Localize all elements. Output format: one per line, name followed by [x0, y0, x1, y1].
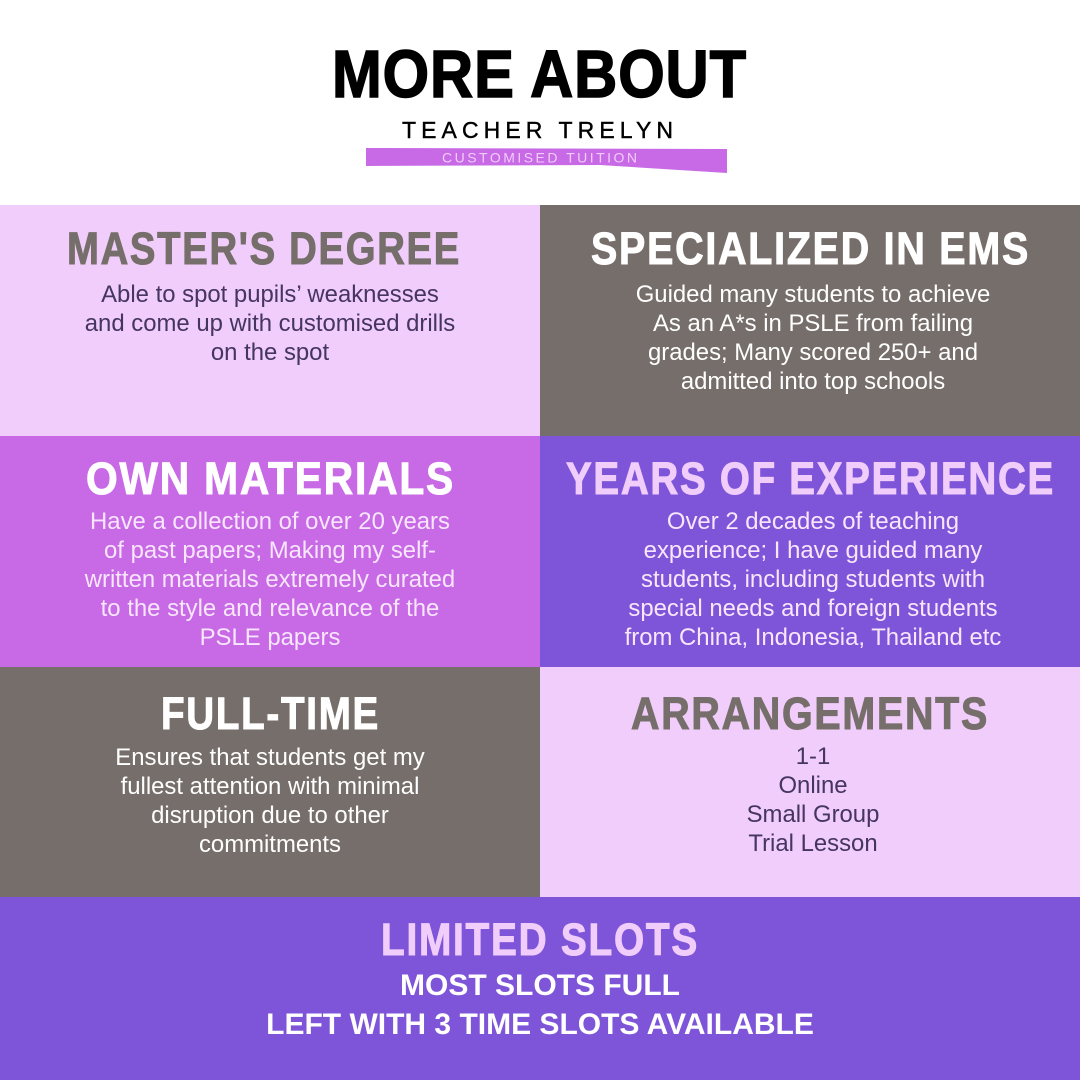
- text block: As an A*s in PSLE from failing: [653, 310, 973, 337]
- text block: PSLE papers: [200, 624, 340, 651]
- text block: written materials extremely curated: [85, 566, 455, 593]
- text block: [636, 281, 990, 395]
- text block: Able to spot pupils’ weaknesses: [101, 281, 439, 308]
- panel: arrangements: [540, 667, 1080, 897]
- text block: students, including students with: [641, 566, 985, 593]
- panel: years of experience: [540, 436, 1080, 667]
- text block: Over 2 decades of teaching: [667, 508, 959, 535]
- text block: [747, 743, 879, 857]
- heading: SPECIALIZED IN EMS: [591, 223, 1030, 274]
- text block: Online: [778, 772, 848, 799]
- text block: [624, 508, 1001, 651]
- heading: ARRANGEMENTS: [631, 688, 989, 739]
- heading: MASTER'S DEGREE: [67, 223, 461, 274]
- text block: Have a collection of over 20 years: [90, 508, 450, 535]
- panel: limited slots: [0, 897, 1080, 1080]
- text block: commitments: [199, 831, 341, 858]
- text block: fullest attention with minimal: [121, 773, 419, 800]
- text block: on the spot: [211, 339, 329, 366]
- subtitle: TEACHER TRELYN: [402, 117, 673, 143]
- panel: specialized in EMS: [540, 205, 1080, 436]
- text block: disruption due to other: [151, 802, 389, 829]
- heading: OWN MATERIALS: [86, 453, 455, 504]
- text block: Guided many students to achieve: [636, 281, 990, 308]
- panel: full-time: [0, 667, 540, 897]
- text block: special needs and foreign students: [628, 595, 998, 622]
- text block: admitted into top schools: [681, 368, 945, 395]
- title: MORE ABOUT: [332, 37, 747, 112]
- text block: [266, 969, 814, 1041]
- text block: from China, Indonesia, Thailand etc: [625, 624, 1001, 651]
- heading: FULL-TIME: [161, 688, 380, 739]
- text block: Trial Lesson: [748, 830, 878, 857]
- brush banner: customised tuition: [366, 148, 727, 173]
- text block: Small Group: [747, 801, 879, 828]
- panel: own materials: [0, 436, 540, 667]
- panel: master's degree: [0, 205, 540, 436]
- text block: [84, 508, 455, 651]
- text block: 1-1: [796, 743, 830, 770]
- text block: Ensures that students get my: [115, 744, 425, 771]
- text block: MOST SLOTS FULL: [400, 969, 680, 1002]
- text block: LEFT WITH 3 TIME SLOTS AVAILABLE: [266, 1008, 814, 1041]
- text block: experience; I have guided many: [644, 537, 982, 564]
- text block: of past papers; Making my self-: [104, 537, 436, 564]
- brush banner: customised tuition: CUSTOMISED TUITION: [442, 150, 637, 166]
- text block: [85, 281, 455, 366]
- text block: to the style and relevance of the: [101, 595, 439, 622]
- text block: grades; Many scored 250+ and: [648, 339, 978, 366]
- heading: LIMITED SLOTS: [381, 914, 699, 965]
- text block: and come up with customised drills: [85, 310, 455, 337]
- text block: [115, 744, 425, 858]
